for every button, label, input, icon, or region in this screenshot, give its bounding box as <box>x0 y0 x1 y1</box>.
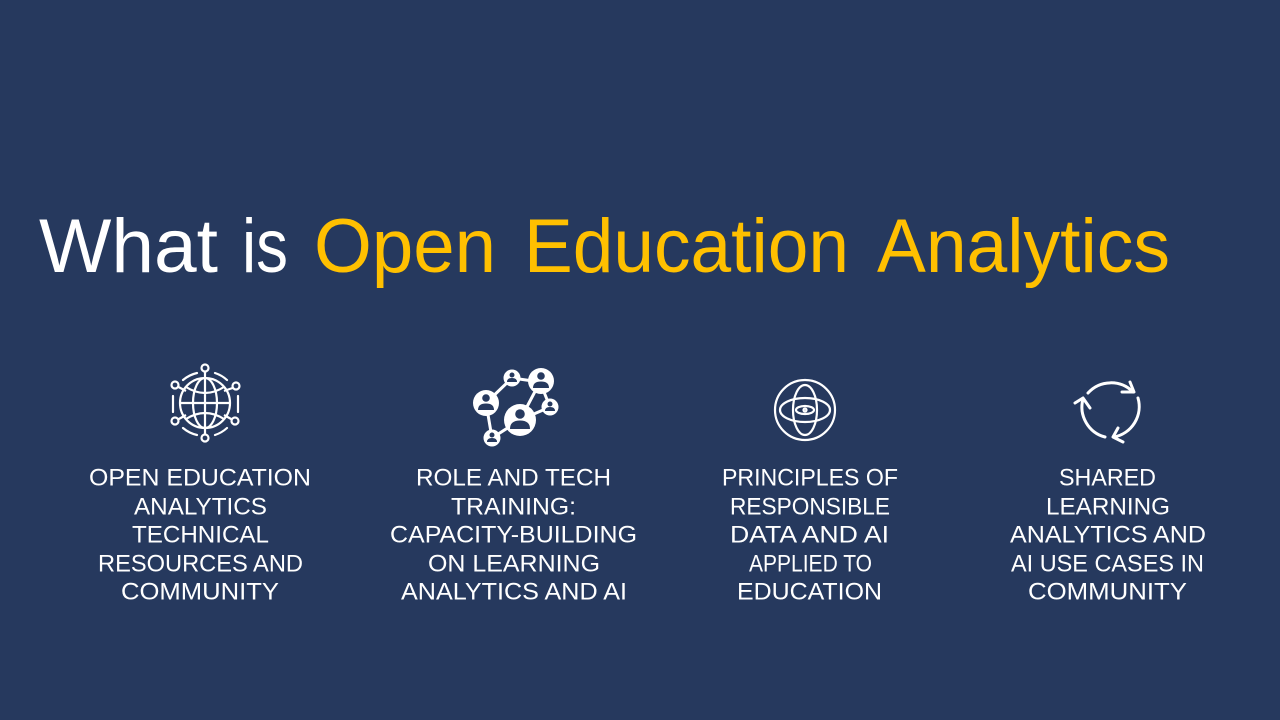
icon: globe network <box>172 364 240 442</box>
text: role and tech training: CAPACITY-BUILDING <box>390 522 637 548</box>
title: Analytics <box>877 204 1170 289</box>
text: technical resources and community: TECHNICAL <box>132 522 269 548</box>
title: Education <box>524 204 849 289</box>
text: role and tech training: ANALYTICS AND AI <box>401 578 627 606</box>
text: shared use cases: SHARED <box>1059 464 1156 492</box>
title: Open <box>314 204 496 289</box>
text: principles of responsible data and AI: APPLIED TO <box>749 550 872 578</box>
text: role and tech training: ROLE AND TECH <box>416 464 611 492</box>
title: What <box>39 204 218 289</box>
title <box>39 204 1170 289</box>
text: principles of responsible data and AI: RESPONSIBLE <box>730 494 890 520</box>
text: principles of responsible data and AI: PRINCIPLES OF <box>722 464 898 492</box>
text: role and tech training <box>390 464 637 606</box>
text: principles of responsible data and AI: EDUCATION <box>737 578 882 606</box>
text: role and tech training: ON LEARNING <box>428 550 600 578</box>
text: shared use cases: ANALYTICS AND <box>1010 522 1206 548</box>
title: is <box>242 204 288 289</box>
text: shared use cases <box>1010 464 1206 606</box>
icon: cycle arrows <box>1075 382 1139 442</box>
icon: people network <box>473 368 558 446</box>
text: shared use cases: LEARNING <box>1046 494 1170 520</box>
text: technical resources and community: COMMUNITY <box>121 578 279 606</box>
text: technical resources and community: OPEN EDUCATION <box>89 464 311 492</box>
text: technical resources and community: RESOURCES AND <box>98 550 303 578</box>
text: principles of responsible data and AI <box>722 464 898 606</box>
text: technical resources and community: ANALYTICS <box>134 494 267 520</box>
icon: eye orbit <box>775 380 835 440</box>
text: technical resources and community <box>89 464 311 606</box>
text: shared use cases: COMMUNITY <box>1028 578 1187 606</box>
text: role and tech training: TRAINING: <box>451 494 576 520</box>
text: shared use cases: AI USE CASES IN <box>1011 550 1204 578</box>
text: principles of responsible data and AI: DATA AND AI <box>730 522 889 548</box>
